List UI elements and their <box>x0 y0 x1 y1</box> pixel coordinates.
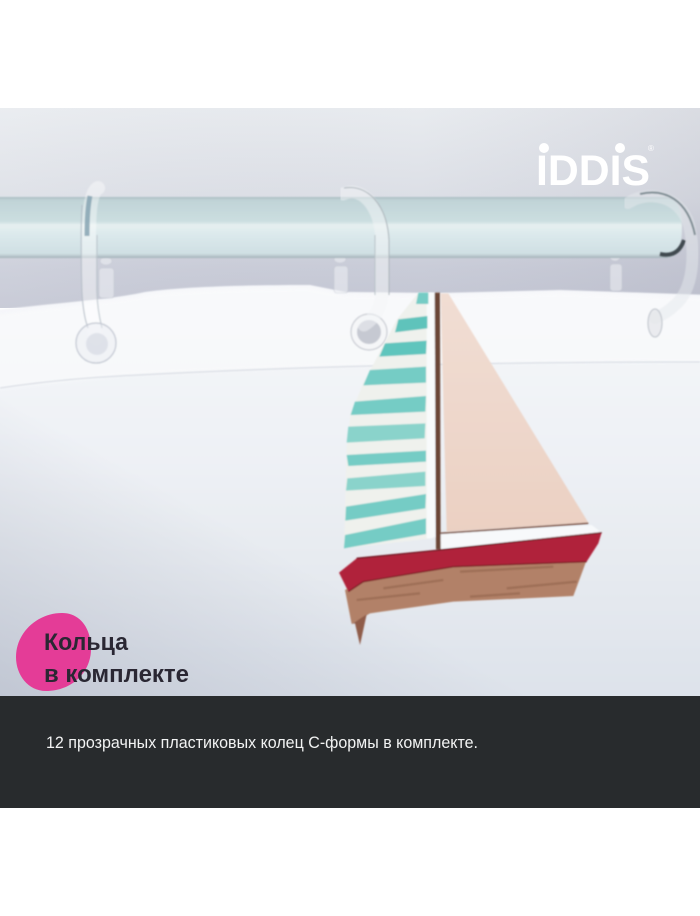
curtain fabric <box>0 285 700 700</box>
infographic canvas <box>0 108 700 808</box>
boom <box>441 523 588 533</box>
photo: curtain on rod <box>0 108 700 700</box>
dark caption band <box>0 696 700 808</box>
pink blob <box>16 613 91 691</box>
back pegs of rings <box>99 258 622 298</box>
logo: IDDIS: ® <box>648 144 654 153</box>
ring 3 <box>628 193 695 337</box>
mast <box>435 293 441 549</box>
heading <box>44 629 189 688</box>
deck <box>441 525 602 548</box>
hull <box>339 533 602 645</box>
peach sail <box>441 293 588 532</box>
wall behind the rod <box>0 108 700 308</box>
heading: в комплекте <box>44 661 189 688</box>
heading: Кольца <box>44 629 129 656</box>
ring 2 <box>343 188 389 350</box>
caption text: 12 прозрачных пластиковых колец С-формы в комплекте. <box>46 734 478 752</box>
striped sail <box>344 293 435 548</box>
ring 1 <box>76 188 116 363</box>
sailboat illustration <box>339 293 602 645</box>
shower rod <box>0 197 682 258</box>
logo: IDDIS: IDDIS <box>536 147 650 195</box>
